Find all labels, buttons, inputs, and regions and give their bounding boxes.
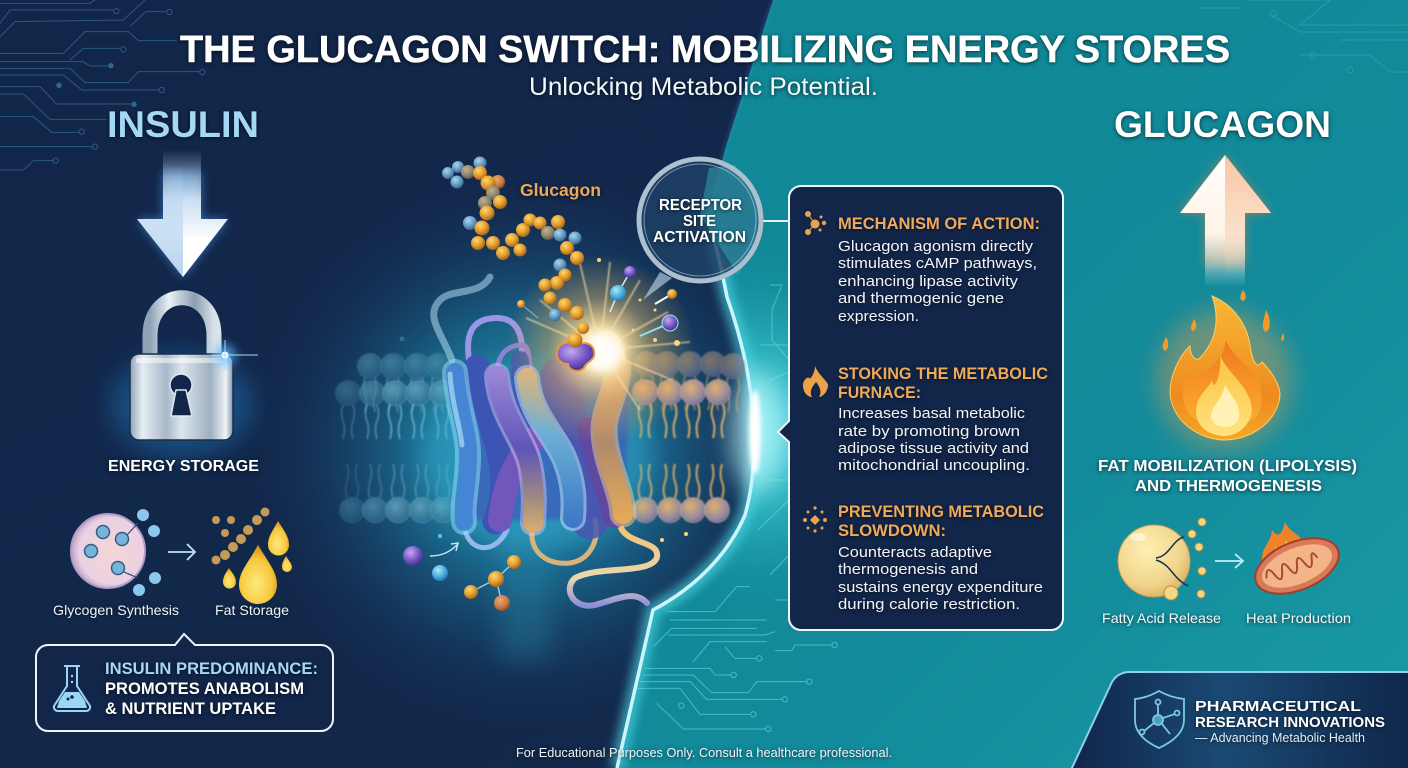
background: teal right panel <box>617 0 1408 768</box>
membrane: front top row right <box>632 380 730 438</box>
section: mechanism of action: MECHANISM OF ACTION: <box>838 215 1040 233</box>
receptor body backing <box>455 370 630 520</box>
label: glycogen synthesis: Glycogen Synthesis <box>53 602 179 618</box>
logo panel <box>1071 672 1408 768</box>
binding site <box>557 343 594 371</box>
arrow: fatty acid to heat <box>1215 554 1243 568</box>
section: stoking the metabolic furnace: FURNACE: <box>838 384 921 402</box>
icon: fat storage <box>212 508 292 604</box>
callout text: INSULIN PREDOMINANCE: <box>105 660 318 678</box>
main title: THE GLUCAGON SWITCH: MOBILIZING ENERGY STORES <box>180 29 1230 71</box>
section: mechanism of action: and thermogenic gene <box>838 290 1004 307</box>
heading: INSULIN: INSULIN <box>107 104 259 145</box>
icon: fat cell releasing fatty acids <box>1118 518 1206 600</box>
helix: purple to gold <box>497 376 534 523</box>
section: stoking the metabolic furnace: mitochondrial uncoupling. <box>838 457 1030 474</box>
section: mechanism of action: expression. <box>838 308 919 325</box>
intracellular loop: gold <box>532 520 596 563</box>
logo text: — Advancing Metabolic Health <box>1195 730 1365 745</box>
section: preventing metabolic slowdown: Counteracts adaptive <box>838 544 992 561</box>
burst rays <box>526 255 690 410</box>
bright flare on arc <box>731 372 785 492</box>
helix: gold to blue core <box>527 378 574 518</box>
label: fat mobilization: FAT MOBILIZATION (LIPOLYSIS) <box>1098 458 1357 475</box>
bubble: receptor site activation: SITE <box>683 213 716 230</box>
section: mechanism of action: enhancing lipase activity <box>838 273 1019 290</box>
panel: mechanism text <box>778 186 1063 630</box>
burst core <box>583 332 623 372</box>
label: fat mobilization: AND THERMOGENESIS <box>1135 478 1322 495</box>
activation burst <box>400 255 695 542</box>
glucagon peptide chain <box>442 156 589 348</box>
membrane: back row heads <box>358 352 746 412</box>
helix: blue left core <box>455 372 468 522</box>
sparks <box>400 258 688 542</box>
connector line: bubble to panel <box>760 220 790 222</box>
free molecules <box>403 266 678 611</box>
section: preventing metabolic slowdown: during calorie restriction. <box>838 596 1020 613</box>
section: mechanism of action: stimulates cAMP pathways, <box>838 255 1037 272</box>
helix: blue left highlight <box>450 374 462 445</box>
heading: GLUCAGON: GLUCAGON <box>1114 104 1331 145</box>
helix: back wedge translucent <box>560 375 590 520</box>
circuit pattern: top left <box>0 0 205 170</box>
icon: padlock <box>110 298 258 457</box>
helix: purple to gold core <box>497 376 534 523</box>
GPCR receptor with transmembrane helices and loops <box>420 277 657 606</box>
section: preventing metabolic slowdown <box>838 503 1044 613</box>
section: preventing metabolic slowdown: PREVENTING METABOLIC <box>838 503 1044 521</box>
callout text <box>105 660 318 718</box>
section: stoking the metabolic furnace: rate by promoting brown <box>838 423 1020 440</box>
icon: flame <box>803 366 828 397</box>
membrane: bottom row left <box>340 464 456 522</box>
molecule: blue atom <box>432 565 448 581</box>
label: fat storage: Fat Storage <box>215 602 289 618</box>
icon: flame <box>1156 290 1292 450</box>
extracellular loop: blue tail <box>434 277 490 360</box>
footer disclaimer: For Educational Purposes Only. Consult a healthcare professional. <box>516 745 892 760</box>
helix: purple crossing <box>500 438 535 520</box>
molecule: gold network <box>464 555 521 611</box>
helix: back center <box>520 360 530 520</box>
arrow: down <box>137 150 228 277</box>
pointer tail of bubble <box>643 272 672 300</box>
circuit pattern: beside arc <box>758 285 789 600</box>
icon: mitochondrion with flame <box>1247 522 1347 605</box>
bubble: receptor site activation: ACTIVATION <box>653 229 746 246</box>
glow on teal side of the arc <box>728 290 788 569</box>
extracellular loop: small purple <box>497 345 532 375</box>
soft glow behind receptor <box>420 360 650 550</box>
extracellular loop: purple <box>468 318 522 365</box>
section: stoking the metabolic furnace <box>838 365 1048 474</box>
logo text: RESEARCH INNOVATIONS <box>1195 714 1385 731</box>
logo text <box>1195 698 1385 745</box>
molecule: gold atom <box>655 289 677 304</box>
section: stoking the metabolic furnace: Increases basal metabolic <box>838 405 1026 422</box>
label: heat production: Heat Production <box>1246 610 1351 626</box>
bubble: receptor site activation: RECEPTOR <box>659 197 742 214</box>
arrow: up <box>1180 155 1271 287</box>
callout text: & NUTRIENT UPTAKE <box>105 700 276 718</box>
helix: back right <box>590 430 615 515</box>
glowing arc divider <box>617 215 754 768</box>
circuit pattern: top right <box>1200 0 1408 73</box>
label: fat mobilization <box>1098 458 1357 495</box>
section: stoking the metabolic furnace: adipose tissue activity and <box>838 440 1029 457</box>
section: mechanism of action: Glucagon agonism directly <box>838 238 1034 255</box>
molecule: purple atom with arrow <box>403 543 458 566</box>
molecule: small gold atom <box>517 300 538 318</box>
molecule: purple and blue pair <box>610 266 636 312</box>
helix: blue left <box>455 372 468 522</box>
arrow: glycogen to fat <box>168 544 195 560</box>
extracellular loop: gold <box>593 333 622 368</box>
icon: diamond dots <box>803 506 827 533</box>
membrane: bottom row right <box>632 464 730 522</box>
label: Glucagon: Glucagon <box>520 180 601 200</box>
circuit pattern: bottom teal <box>637 587 837 732</box>
icon: flask <box>54 666 90 711</box>
helix: right gold core <box>604 368 623 514</box>
callout: insulin predominance <box>36 634 333 731</box>
section: mechanism of action <box>838 215 1040 325</box>
logo text: PHARMACEUTICAL <box>1195 698 1361 715</box>
label: energy storage: ENERGY STORAGE <box>108 458 259 475</box>
section: preventing metabolic slowdown: sustains energy expenditure <box>838 579 1043 596</box>
helix: back deep blue <box>477 367 503 522</box>
label: fatty acid release: Fatty Acid Release <box>1102 610 1221 626</box>
helix: gold to blue <box>527 378 574 518</box>
bubble: receptor site activation <box>638 158 762 282</box>
icon: molecule dots <box>805 211 826 235</box>
long tail <box>570 525 657 606</box>
section: preventing metabolic slowdown: SLOWDOWN: <box>838 522 946 540</box>
lipid bilayer membrane <box>336 352 746 522</box>
molecule: purple atom <box>640 315 678 336</box>
membrane: front top row left <box>336 380 454 439</box>
icon: shield with molecule <box>1135 691 1184 748</box>
central membrane glow <box>296 217 743 683</box>
helix: right gold <box>604 368 623 514</box>
section: stoking the metabolic furnace: STOKING THE METABOLIC <box>838 365 1048 383</box>
icon: glycogen cell <box>71 509 161 596</box>
intracellular loop: blue <box>465 530 507 548</box>
vertical light beam below receptor <box>500 530 550 660</box>
section: preventing metabolic slowdown: thermogenesis and <box>838 561 978 578</box>
subtitle: Unlocking Metabolic Potential. <box>529 73 878 101</box>
light sliver along divider <box>707 0 773 275</box>
callout text: PROMOTES ANABOLISM <box>105 680 304 698</box>
